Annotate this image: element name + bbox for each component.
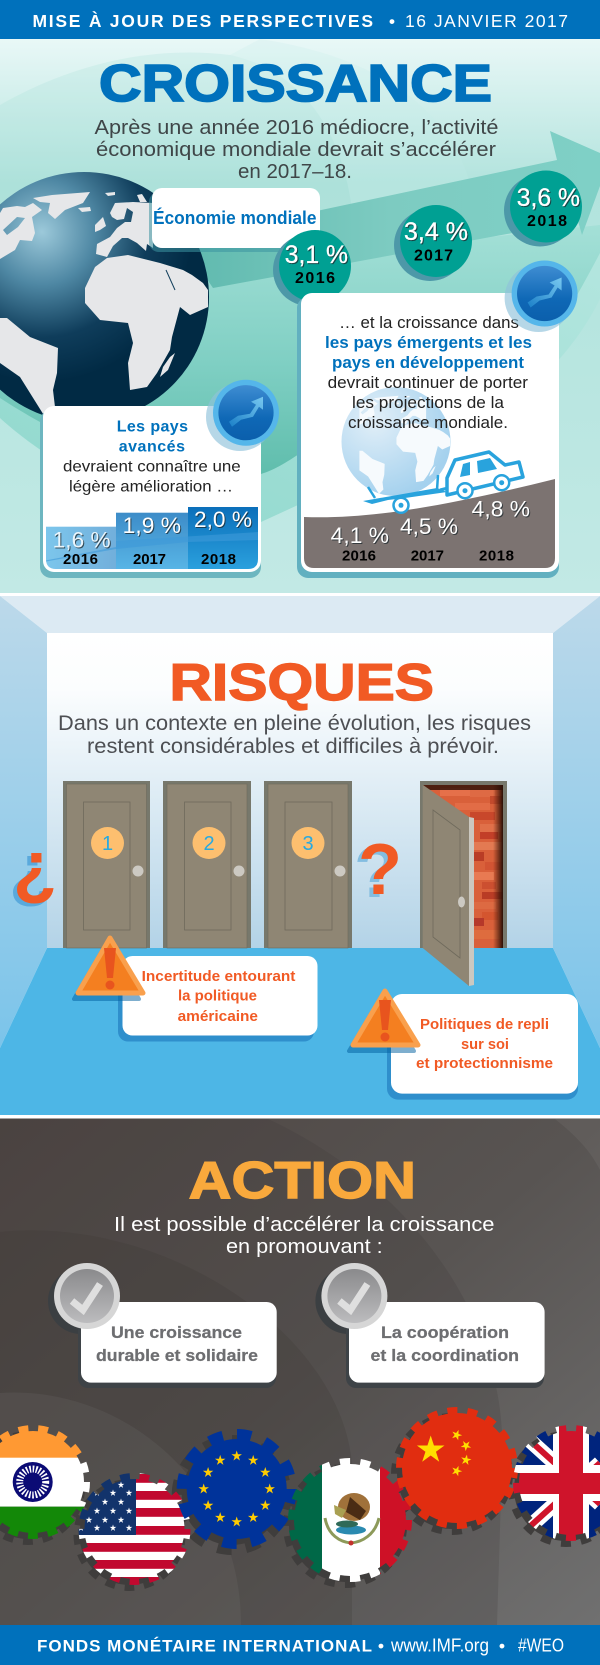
badge: 2016 world growth: [273, 230, 351, 306]
card: croissance durable: Une croissance: [111, 1324, 242, 1342]
intro text: action: en promouvant :: [226, 1235, 383, 1258]
open door with brick wall: [420, 781, 507, 986]
card: coopération et coordination: La coopération: [381, 1324, 509, 1342]
emerging markets text: … et la croissance dans: [339, 314, 519, 332]
intro text: croissance: Après une année 2016 médiocre, l’activité: [94, 116, 498, 139]
emerging markets text: pays en développement: [332, 354, 525, 372]
label box: économie mondiale: Économie mondiale: [153, 207, 316, 228]
emerging markets text: les pays émergents et les: [325, 334, 532, 352]
arrow: global growth: [180, 131, 600, 288]
icon: rising arrow disc, advanced: [206, 380, 279, 451]
callout: repli sur soi et protectionnisme: sur soi: [461, 1036, 509, 1053]
gear flag: Mexico: [285, 1455, 415, 1585]
door 3: [264, 781, 352, 948]
intro text: croissance: économique mondiale devrait s’accélérer: [96, 138, 496, 161]
intro text: action: Il est possible d’accélérer la croissance: [114, 1213, 494, 1236]
card: croissance durable: [48, 1263, 277, 1388]
title: risques: RISQUES: [170, 654, 434, 712]
callout: repli sur soi et protectionnisme: [349, 991, 578, 1100]
callout: incertitude américaine: la politique: [178, 988, 257, 1005]
label box: économie mondiale: [149, 188, 320, 252]
icon: car towing globe: [363, 452, 523, 513]
bar chart: advanced economies: 2017: [133, 551, 166, 568]
icon: rising arrow disc, emerging: [505, 260, 578, 332]
icon: check badge 1: [54, 1263, 120, 1329]
intro text: croissance: [94, 116, 498, 183]
values: emerging markets: 2017: [411, 548, 444, 565]
door 2: 2: [203, 833, 215, 855]
badge: 2017 world growth: [394, 205, 472, 281]
callout: incertitude américaine: Incertitude entourant: [142, 968, 295, 985]
badge: 2018 world growth: [504, 170, 582, 246]
advanced economies text: légère amélioration …: [69, 479, 233, 496]
emerging markets text: [325, 314, 532, 432]
values: emerging markets: 2016: [342, 548, 376, 565]
callout: incertitude américaine: [74, 938, 318, 1042]
icon: inverted question mark: ¿: [13, 827, 57, 907]
bar chart: advanced economies: 1,6 %: [53, 528, 111, 553]
card: coopération et coordination: et la coordination: [370, 1347, 519, 1365]
icon: question mark: ?: [354, 833, 398, 913]
gear flag: India: [0, 1425, 90, 1539]
callout: repli sur soi et protectionnisme: Politiques de repli: [420, 1016, 549, 1033]
bar chart: advanced economies: 2018: [201, 551, 236, 568]
values: emerging markets: 4,8 %: [472, 497, 530, 522]
icon: inverted question mark: ¿: [9, 830, 53, 910]
bar chart: advanced economies: 2,0 %: [194, 507, 252, 532]
hill: [304, 479, 555, 568]
badge: 2017 world growth: 3,4 %: [404, 218, 468, 246]
icon: warning triangle 2: [349, 991, 418, 1051]
card: croissance durable: durable et solidaire: [96, 1347, 258, 1365]
icon: question mark: ?: [358, 830, 402, 910]
icon: warning triangle 1: [74, 938, 143, 999]
door 1: 1: [102, 833, 113, 855]
panel: risques room: [0, 593, 600, 1119]
title: croissance: CROISSANCE: [99, 55, 492, 113]
bar chart: advanced economies: 1,9 %: [123, 513, 181, 538]
emerging markets text: croissance mondiale.: [348, 414, 508, 432]
advanced economies text: devraient connaître une: [63, 459, 241, 476]
intro text: croissance: en 2017–18.: [238, 160, 352, 183]
badge: 2018 world growth: 3,6 %: [517, 184, 580, 212]
footer band: FONDS MONÉTAIRE INTERNATIONAL: [37, 1637, 372, 1656]
footer band: [0, 1625, 600, 1665]
icon: check badge 2: [321, 1263, 387, 1329]
door 1: [63, 781, 150, 948]
callout: repli sur soi et protectionnisme: et protectionnisme: [416, 1055, 553, 1072]
gear flag: China: [395, 1405, 520, 1535]
badge: 2016 world growth: 3,1 %: [285, 241, 348, 269]
gear flag: European Union: [176, 1429, 296, 1549]
header band: 16 JANVIER 2017: [405, 11, 568, 31]
advanced economies text: Les pays: [117, 419, 188, 436]
footer band: •: [499, 1637, 505, 1656]
intro text: action: [114, 1213, 494, 1258]
panel: pays émergents: [297, 260, 578, 578]
advanced economies text: avancés: [119, 439, 185, 456]
values: emerging markets: 4,1 %: [331, 523, 389, 548]
footer band: #WEO: [518, 1636, 564, 1656]
door 2: [163, 781, 251, 948]
footer band: •: [378, 1637, 384, 1656]
intro text: risques: restent considérables et difficiles à prévoir.: [87, 735, 499, 758]
card: coopération et coordination: [315, 1263, 545, 1388]
gear flag: United Kingdom: [513, 1425, 600, 1541]
header band: [0, 0, 600, 39]
panel: action background: [0, 1115, 600, 1626]
emerging markets text: les projections de la: [352, 394, 505, 412]
footer band: www.IMF.org: [390, 1636, 489, 1656]
advanced economies text: [63, 419, 241, 496]
badge: 2018 world growth: 2018: [527, 213, 567, 230]
gear flag: United States: [78, 1473, 190, 1585]
panel: pays avancés: [40, 380, 279, 578]
gear shadows: [0, 1416, 600, 1588]
bar chart: advanced economies: 2016: [63, 551, 98, 568]
callout: incertitude américaine: américaine: [178, 1008, 258, 1025]
header band: MISE À JOUR DES PERSPECTIVES: [32, 10, 373, 31]
title: action: ACTION: [189, 1152, 416, 1210]
intro text: risques: Dans un contexte en pleine évolution, les risques: [58, 712, 531, 735]
emerging markets text: devrait continuer de porter: [328, 374, 529, 392]
values: emerging markets: 4,5 %: [400, 514, 458, 539]
bar chart: advanced economies: [43, 507, 258, 570]
badge: 2016 world growth: 2016: [295, 270, 335, 287]
values: emerging markets: 2018: [479, 548, 514, 565]
values: emerging markets: [331, 497, 530, 565]
panel: croissance background: [0, 39, 600, 593]
icon: globe: [0, 172, 209, 422]
door 3: 3: [302, 833, 314, 855]
intro text: risques: [58, 712, 531, 758]
header band: •: [389, 12, 395, 31]
badge: 2017 world growth: 2017: [414, 248, 453, 265]
icon: pale globe: [342, 387, 450, 496]
